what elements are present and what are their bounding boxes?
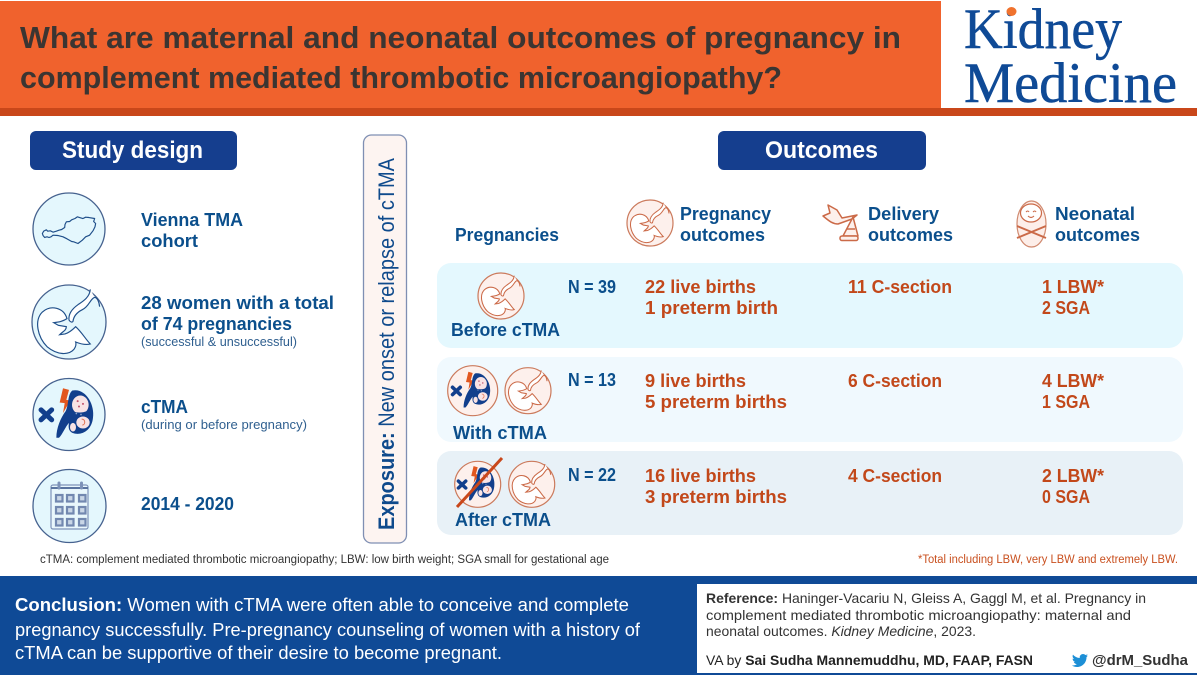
pregnancy outcomes: [645, 371, 787, 412]
table header: neonatal outcomes: [1017, 201, 1140, 247]
pregnancy outcomes: 3 preterm births: [645, 487, 787, 507]
icon: fetus: [32, 285, 106, 359]
neonatal outcomes: [1042, 277, 1104, 318]
neonatal outcomes: 0 SGA: [1042, 487, 1090, 507]
panel: exposure: [364, 135, 406, 543]
icon: calendar: [33, 470, 106, 542]
panel: conclusion: pregnancy successfully. Pre-pregnancy counseling of women with a history of: [15, 620, 641, 640]
footnote: total LBW: *Total including LBW, very LBW and extremely LBW.: [918, 554, 1178, 566]
row: before cTMA: N = 39: [568, 277, 616, 297]
pregnancy outcomes: [645, 466, 787, 507]
pregnancy outcomes: 1 preterm birth: [645, 298, 778, 318]
table header: neonatal outcomes: Neonatal: [1055, 204, 1135, 224]
icon: map of Austria: [33, 193, 105, 265]
reference: [706, 590, 1146, 639]
row: after cTMA: After cTMA: [455, 510, 551, 530]
text: cTMA: (during or before pregnancy): [141, 417, 307, 432]
icon: kidney with cTMA: [448, 366, 498, 416]
pregnancy outcomes: [645, 277, 778, 318]
panel: conclusion: [0, 576, 1197, 675]
panel: conclusion: Conclusion: Women with cTMA were often able to conceive and complete: [15, 595, 629, 615]
author credit: VA by Sai Sudha Mannemuddhu, MD, FAAP, FASN: [706, 652, 1033, 668]
row: with cTMA: N = 13: [568, 370, 616, 390]
pregnancy outcomes: 9 live births: [645, 371, 746, 391]
icon: kidney crossed out: [455, 458, 502, 507]
heading: outcomes: [718, 131, 926, 170]
icon: twitter bird: [1072, 654, 1088, 667]
title: complement mediated thrombotic microangiopathy?: [20, 60, 782, 95]
text: 28 women: of 74 pregnancies: [141, 314, 292, 334]
twitter handle: @drM_Sudha: [1092, 653, 1189, 669]
reference: Reference: Haninger-Vacariu N, Gleiss A, Gaggl M, et al. Pregnancy in: [706, 590, 1146, 606]
panel: reference and credits: [697, 584, 1197, 673]
text: 28 women: [141, 293, 334, 349]
neonatal outcomes: [1042, 371, 1104, 412]
reference: complement mediated thrombotic microangiopathy: maternal and: [706, 607, 1131, 623]
text: cTMA: [141, 397, 307, 432]
neonatal outcomes: 1 LBW*: [1042, 277, 1104, 297]
text: 28 women: (successful & unsuccessful): [141, 334, 297, 349]
journal logo: [964, 0, 1177, 115]
table header: delivery outcomes: Delivery: [868, 204, 939, 224]
neonatal outcomes: 4 LBW*: [1042, 371, 1104, 391]
heading: study design: [30, 131, 237, 170]
title: [20, 20, 901, 95]
neonatal outcomes: [1042, 466, 1104, 507]
icon: stork delivery: [823, 205, 858, 240]
panel: conclusion: cTMA can be supportive of their desire to become pregnant.: [15, 643, 502, 663]
text: 28 women: 28 women with a total: [141, 293, 334, 313]
text: Vienna TMA cohort: [141, 210, 243, 251]
table header: pregnancy outcomes: Pregnancy: [680, 204, 771, 224]
table header: neonatal outcomes: outcomes: [1055, 225, 1140, 245]
table header: delivery outcomes: outcomes: [868, 225, 953, 245]
journal logo: Medicine: [964, 52, 1177, 115]
table header: pregnancy outcomes: [627, 200, 771, 246]
text: cTMA: cTMA: [141, 397, 188, 417]
heading: study design: Study design: [62, 137, 203, 164]
row: after cTMA: N = 22: [568, 465, 616, 485]
icon: fetus with cTMA: [505, 368, 551, 414]
header banner: [0, 1, 1197, 116]
icon: fetus after cTMA: [509, 461, 555, 507]
title: What are maternal and neonatal outcomes of pregnancy in: [20, 20, 901, 55]
neonatal outcomes: 1 SGA: [1042, 392, 1090, 412]
heading: outcomes: Outcomes: [765, 137, 878, 164]
row: before cTMA: [437, 263, 1183, 348]
row: with cTMA: 6 C-section: [848, 371, 942, 391]
panel: exposure: Exposure: New onset or relapse of cTMA: [374, 158, 399, 530]
reference: neonatal outcomes. Kidney Medicine, 2023.: [706, 623, 976, 639]
icon: kidney with complement: [33, 378, 105, 450]
text: 2014 - 2020: 2014 - 2020: [141, 494, 234, 514]
row: with cTMA: With cTMA: [453, 423, 547, 443]
table header: pregnancy outcomes: outcomes: [680, 225, 765, 245]
table header: delivery outcomes: [823, 204, 953, 245]
pregnancy outcomes: 5 preterm births: [645, 392, 787, 412]
footnote: abbreviations: cTMA: complement mediated thrombotic microangiopathy; LBW: low birth weight; SGA small for gestational age: [40, 554, 609, 566]
text: Vienna TMA cohort: cohort: [141, 231, 198, 251]
panel: study design: [30, 131, 334, 542]
icon: fetus before cTMA: [478, 273, 524, 319]
row: with cTMA: [437, 357, 1183, 443]
pregnancy outcomes: 22 live births: [645, 277, 756, 297]
row: before cTMA: 11 C-section: [848, 277, 952, 297]
text: Vienna TMA cohort: Vienna TMA: [141, 210, 243, 230]
row: after cTMA: 4 C-section: [848, 466, 942, 486]
icon: swaddled baby: [1017, 201, 1046, 247]
neonatal outcomes: 2 SGA: [1042, 298, 1090, 318]
pregnancy outcomes: 16 live births: [645, 466, 756, 486]
row: before cTMA: Before cTMA: [451, 320, 560, 340]
neonatal outcomes: 2 LBW*: [1042, 466, 1104, 486]
row: after cTMA: [437, 451, 1183, 535]
table header: pregnancies: Pregnancies: [455, 225, 559, 245]
